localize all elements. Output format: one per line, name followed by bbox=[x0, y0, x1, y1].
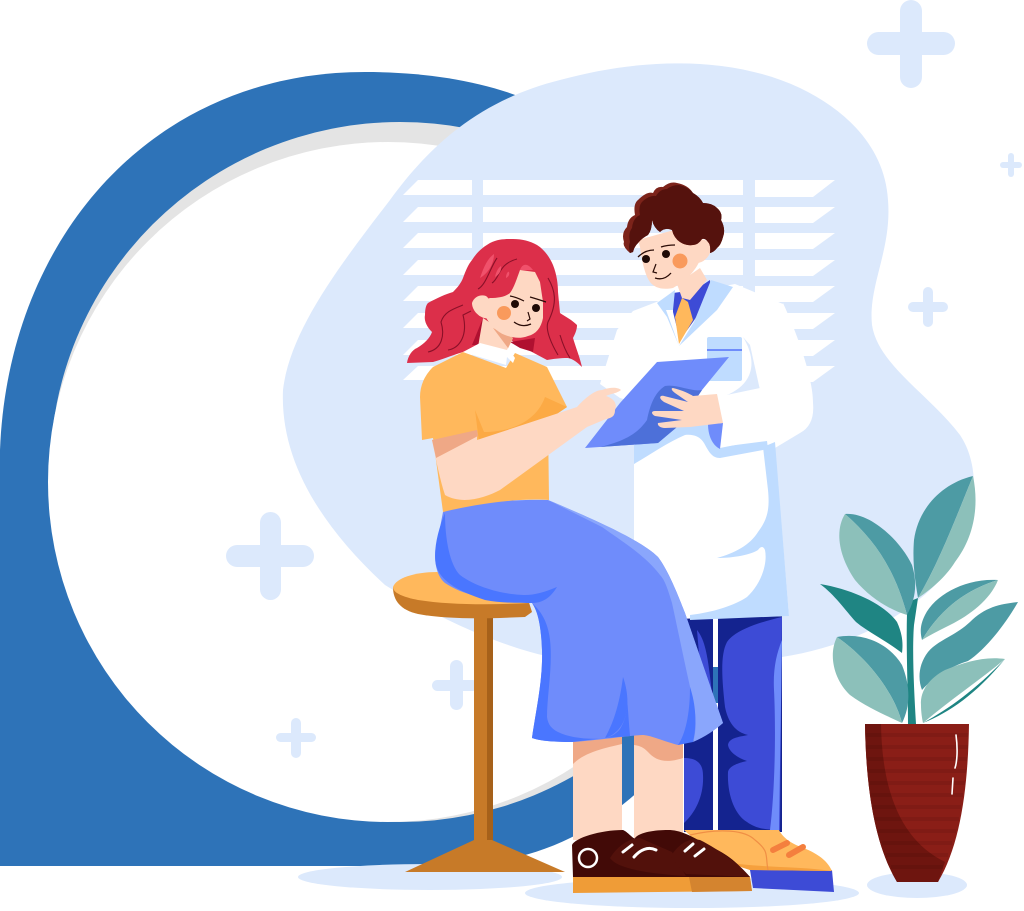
doctor shoe bbox=[684, 830, 834, 892]
skirt highlight band bbox=[548, 500, 723, 742]
patient legs bbox=[573, 733, 683, 840]
trousers bbox=[684, 616, 782, 832]
doctor bbox=[585, 182, 834, 892]
lab coat bbox=[600, 284, 813, 620]
neck shadow bbox=[493, 328, 513, 348]
light blue blob bbox=[283, 63, 974, 662]
clipboard bbox=[585, 357, 729, 448]
icon: medium plus bbox=[908, 287, 948, 327]
patient neck bbox=[478, 318, 513, 351]
floor shadows bbox=[298, 864, 967, 908]
leaf: right large bbox=[920, 602, 1018, 690]
doctor hair bbox=[623, 182, 724, 253]
icon: plus on blob bbox=[432, 660, 478, 710]
sleeve cuff bbox=[708, 423, 723, 449]
hair shadow behind neck bbox=[472, 318, 535, 352]
leaf: dark left bbox=[820, 584, 902, 653]
patient shoes bbox=[572, 830, 752, 893]
icon: tiny plus bbox=[1000, 153, 1022, 177]
hair strands bbox=[428, 258, 570, 358]
under-sleeve band bbox=[634, 424, 768, 464]
patient skirt bbox=[435, 500, 723, 745]
stool bbox=[393, 572, 565, 872]
coat pocket bbox=[707, 337, 742, 381]
window blinds bbox=[403, 180, 835, 382]
stool seat bbox=[393, 572, 532, 618]
doctor neck bbox=[677, 268, 707, 300]
patient shirt bbox=[420, 352, 567, 512]
blue gap between legs bbox=[622, 735, 634, 800]
leaf: upper right bbox=[921, 580, 998, 640]
background: blue arch with white circle bbox=[0, 72, 750, 866]
skirt shade: right fold bbox=[678, 687, 695, 745]
doctor sleeve bbox=[708, 303, 813, 448]
plant stem bbox=[907, 598, 918, 724]
doctor ear bbox=[692, 240, 711, 263]
icon: small plus on white circle bbox=[276, 718, 316, 758]
shirt fold shadow bbox=[475, 397, 567, 450]
patient facial features bbox=[497, 296, 546, 326]
leaf: lower right bbox=[921, 658, 1005, 723]
coat hem and side shading bbox=[690, 442, 789, 620]
hair highlight bbox=[480, 254, 533, 278]
patient bbox=[407, 239, 752, 893]
skirt shade: centre fold bbox=[605, 677, 630, 738]
doctor face bbox=[638, 222, 703, 289]
potted plant bbox=[820, 476, 1018, 882]
patient face bbox=[484, 270, 543, 338]
leaf: top left bbox=[839, 514, 915, 615]
skirt shade: hip bbox=[435, 513, 557, 603]
stool base bbox=[405, 840, 565, 872]
patient collar bbox=[463, 343, 515, 365]
coat lapels bbox=[657, 280, 733, 346]
leaf: top right bbox=[913, 476, 976, 598]
patient ear bbox=[472, 295, 491, 318]
patient hair bbox=[407, 239, 582, 367]
arm shadow bbox=[432, 430, 478, 458]
doctor hand bbox=[652, 388, 723, 428]
doctor facial features bbox=[638, 245, 688, 279]
icon: plus on white circle bbox=[226, 512, 314, 600]
patient arm bbox=[432, 388, 621, 500]
shirt and tie bbox=[673, 280, 711, 344]
stool leg bbox=[474, 612, 493, 844]
skirt shade: knee fall bbox=[532, 603, 605, 742]
icon: top plus bbox=[867, 0, 955, 88]
flower pot bbox=[865, 724, 969, 882]
leaf: lower left bbox=[833, 636, 908, 723]
